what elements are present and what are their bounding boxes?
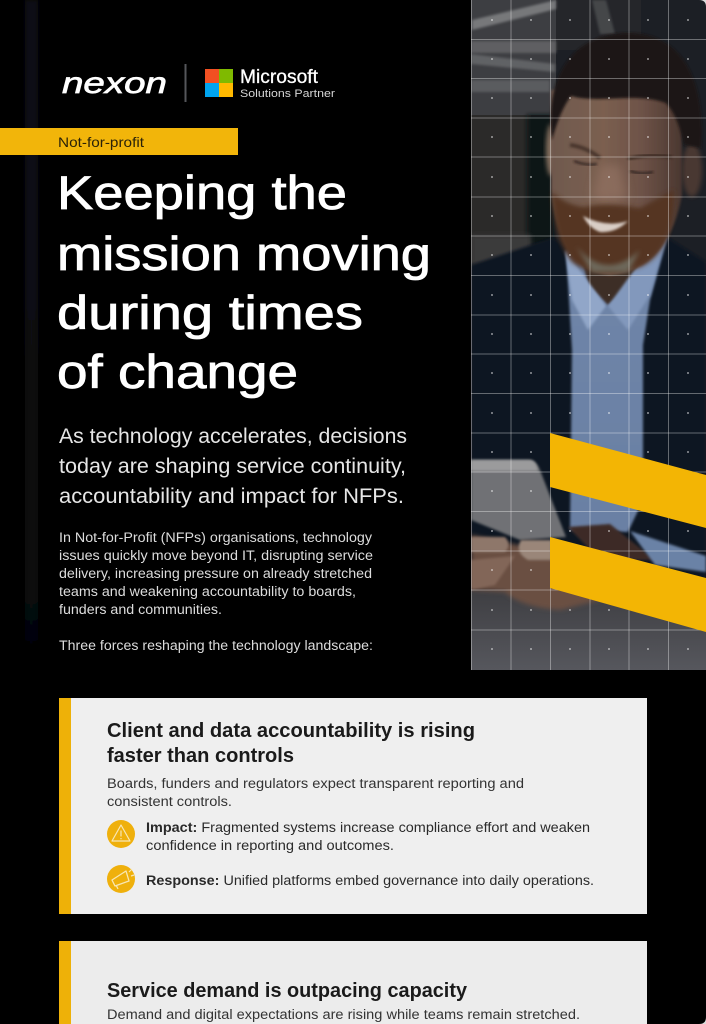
brows and eyes (570, 145, 600, 158)
panel: client and data accountability (59, 698, 647, 914)
logo: Nexon: nexon (62, 67, 167, 100)
panel: service demand (59, 941, 647, 1024)
jacket (471, 238, 706, 578)
smile (583, 216, 628, 232)
subtitle (59, 425, 407, 508)
tablet (471, 460, 566, 540)
logo divider (184, 64, 186, 102)
impact text: Impact: Fragmented systems increase compliance effort and weaken (146, 820, 590, 835)
card description (107, 776, 524, 809)
card description: Demand and digital expectations are rising while teams remain stretched. (107, 1007, 580, 1022)
grid overlay (471, 0, 706, 670)
card description: consistent controls. (107, 794, 232, 809)
intro paragraph: In Not-for-Profit (NFPs) organisations, technology (59, 530, 372, 545)
hair (551, 33, 702, 148)
hands (471, 535, 600, 610)
page corners (699, 0, 706, 1024)
table (471, 590, 706, 670)
intro paragraph: teams and weakening accountability to boards, (59, 584, 356, 599)
shirt (566, 236, 668, 532)
collar (565, 250, 606, 330)
category tag: Not-for-profit (58, 134, 144, 150)
impact text: confidence in reporting and outcomes. (146, 838, 394, 853)
response text: Response: Unified platforms embed governance into daily operations. (146, 873, 594, 888)
nose (592, 165, 627, 202)
subtitle: accountability and impact for NFPs. (59, 485, 404, 508)
logo: Microsoft Solutions Partner: Microsoft (240, 67, 319, 88)
logo: Microsoft Solutions Partner: Solutions Partner (240, 88, 335, 100)
title: mission moving (57, 227, 431, 280)
intro paragraph: delivery, increasing pressure on already stretched (59, 566, 372, 581)
photo: smiling man with tablet and grid overlay (471, 0, 706, 670)
card description: Boards, funders and regulators expect transparent reporting and (107, 776, 524, 791)
face (551, 88, 682, 275)
ear (682, 143, 702, 197)
title: of change (57, 345, 298, 398)
title (57, 166, 431, 398)
beard (552, 190, 674, 273)
section lead-in: Three forces reshaping the technology landscape: (59, 638, 373, 653)
yellow diagonal bands (550, 433, 706, 632)
category tag (0, 128, 238, 155)
neck (582, 266, 637, 306)
subtitle: As technology accelerates, decisions (59, 425, 407, 448)
subtitle: today are shaping service continuity, (59, 455, 406, 478)
intro paragraph (59, 530, 373, 617)
icon: warning triangle (107, 820, 135, 848)
logo: Microsoft Solutions Partner (205, 67, 335, 100)
card heading (107, 720, 475, 767)
card heading: Service demand is outpacing capacity (107, 980, 468, 1002)
card heading: faster than controls (107, 745, 294, 767)
icon: megaphone (107, 865, 135, 893)
title: Keeping the (57, 166, 347, 219)
title: during times (57, 286, 363, 339)
intro paragraph: funders and communities. (59, 602, 222, 617)
card heading: Client and data accountability is rising (107, 720, 475, 742)
impact text (146, 820, 590, 853)
intro paragraph: issues quickly move beyond IT, disrupting service (59, 548, 373, 563)
